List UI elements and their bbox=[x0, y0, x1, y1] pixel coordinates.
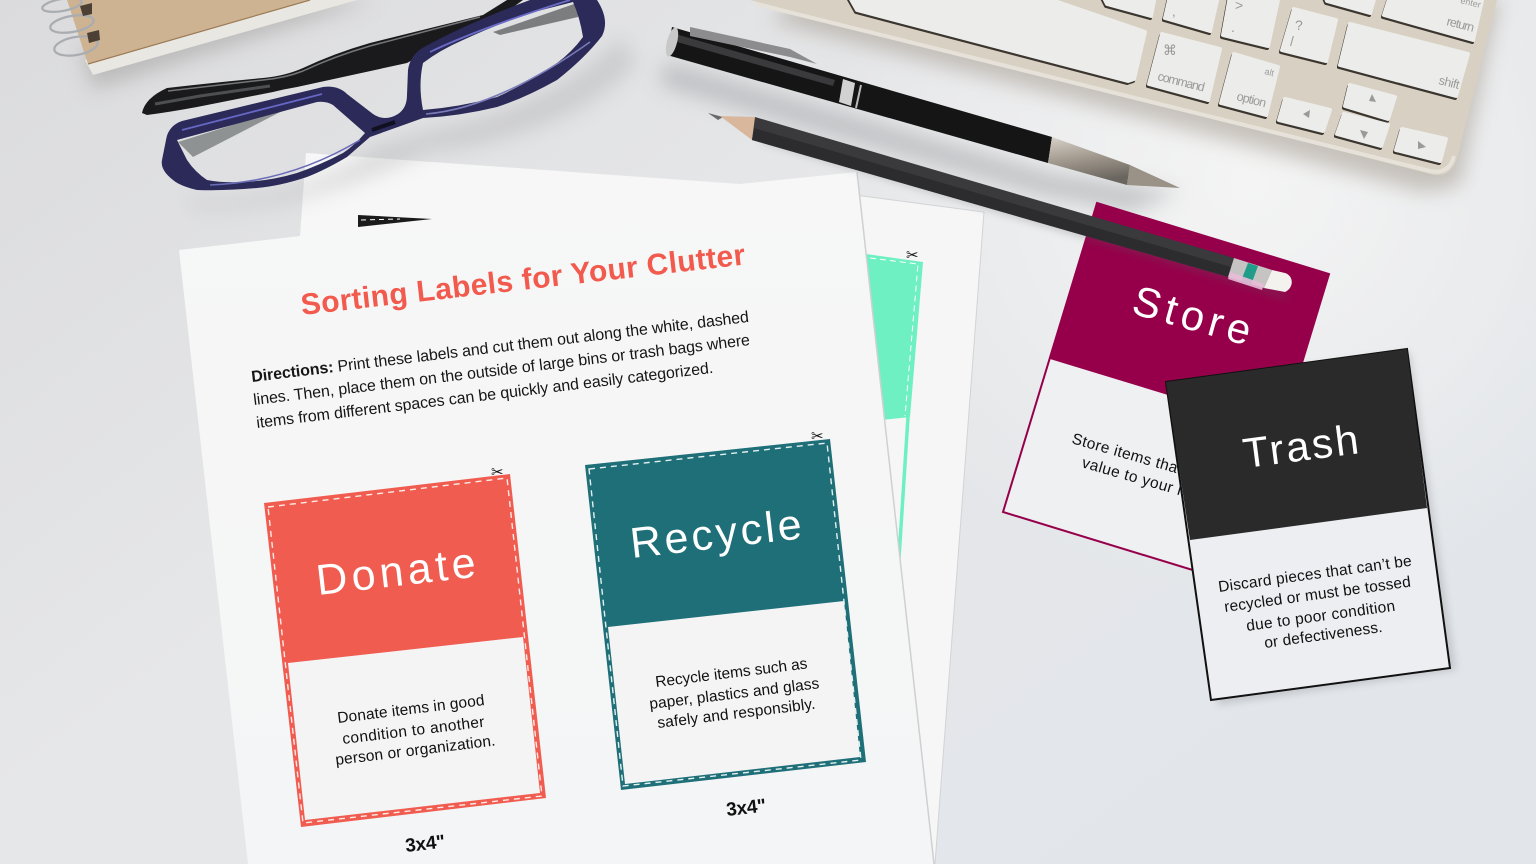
pencil bbox=[708, 113, 1292, 300]
key legends: , bbox=[1172, 4, 1176, 19]
key legends: ? bbox=[1295, 17, 1303, 33]
key legends: option bbox=[1235, 89, 1268, 110]
Store card: value to your lives bbox=[1080, 455, 1212, 507]
Donate label: Donate bbox=[314, 539, 478, 605]
Donate label: ✂ bbox=[491, 463, 504, 481]
Recycle size label: 3x4" bbox=[725, 796, 767, 821]
Donate label: person or organization. bbox=[334, 732, 496, 769]
keyboard bbox=[750, 0, 1500, 192]
frame bbox=[162, 0, 605, 190]
key legends bbox=[1156, 0, 1482, 149]
mint label fragment: ✂ bbox=[906, 246, 919, 264]
Trash card: recycled or must be tossed bbox=[1223, 574, 1412, 616]
pen bbox=[660, 26, 1180, 212]
Donate label: condition to another bbox=[341, 714, 485, 748]
mint label fragment bbox=[866, 246, 923, 558]
directions text bbox=[250, 309, 751, 432]
notebook bbox=[41, 0, 375, 90]
directions text: Directions: Print these labels and cut them out along the white, dashed bbox=[250, 309, 750, 386]
directions text: lines. Then, place them on the outside of large bins or trash bags where bbox=[252, 332, 751, 409]
Recycle label: Recycle items such as bbox=[654, 655, 809, 691]
Recycle label: Recycle bbox=[628, 500, 804, 568]
Trash card: due to poor condition bbox=[1245, 598, 1396, 635]
lens reflections bbox=[178, 107, 290, 157]
key legends: . bbox=[1231, 19, 1235, 35]
Donate label: Donate items in good bbox=[336, 692, 485, 727]
Recycle label: safely and responsibly. bbox=[656, 696, 816, 732]
Store card: Store items that bbox=[1070, 431, 1185, 478]
clipped black label tip bbox=[358, 215, 432, 227]
temple arm bbox=[142, 0, 523, 115]
glasses bbox=[142, 0, 636, 208]
key legends: command bbox=[1156, 69, 1206, 95]
directions text: items from different spaces can be quickly and easily categorized. bbox=[255, 360, 714, 432]
Store card: Store bbox=[1128, 276, 1257, 354]
front paper bbox=[179, 153, 934, 864]
key legends: shift bbox=[1437, 73, 1462, 92]
Trash card bbox=[1166, 349, 1456, 705]
key legends: / bbox=[1290, 33, 1294, 49]
Recycle label: ✂ bbox=[811, 427, 824, 445]
Recycle label bbox=[585, 427, 866, 790]
back paper bbox=[855, 195, 984, 864]
key legends: return bbox=[1445, 14, 1476, 35]
Recycle label: paper, plastics and glass bbox=[648, 675, 820, 713]
Store card bbox=[1003, 203, 1329, 583]
key legends: ⌘ bbox=[1163, 43, 1177, 59]
Trash card: Discard pieces that can’t be bbox=[1217, 553, 1413, 596]
key legends: alt bbox=[1264, 66, 1276, 78]
Trash card: Trash bbox=[1240, 415, 1361, 477]
Trash card: or defectiveness. bbox=[1263, 619, 1383, 652]
title: Sorting Labels for Your Clutter bbox=[299, 239, 747, 322]
Donate size label: 3x4" bbox=[404, 832, 446, 857]
Donate label bbox=[264, 463, 546, 827]
